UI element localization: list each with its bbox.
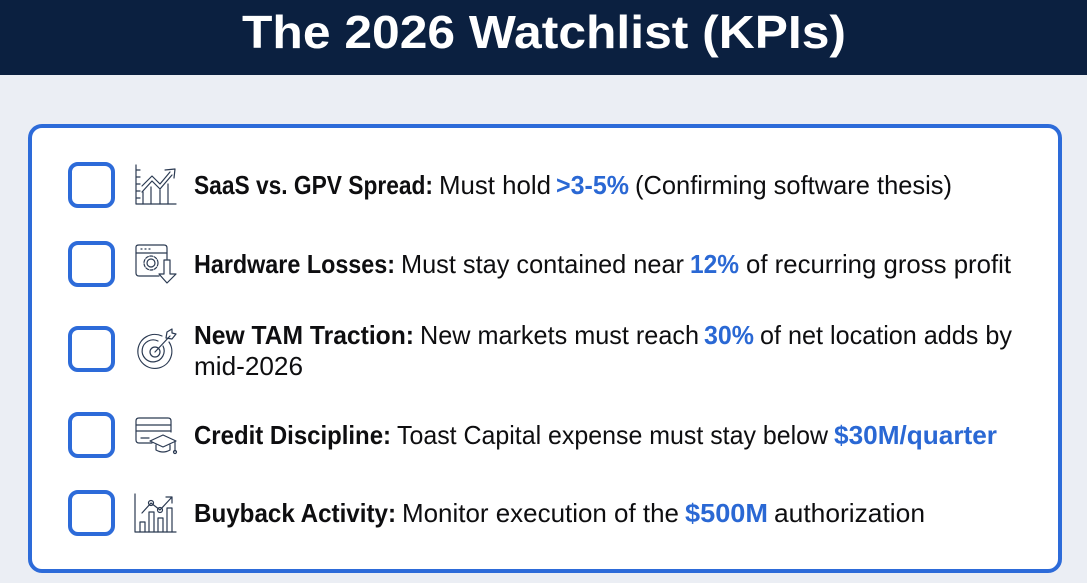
icon: bar chart with trend line bbox=[135, 494, 176, 532]
checkbox bbox=[70, 243, 113, 285]
KPI text: Credit Discipline: bbox=[194, 420, 391, 450]
KPI text: authorization bbox=[774, 498, 925, 528]
KPI text: >3-5% bbox=[556, 170, 629, 200]
KPI text: of net location adds by bbox=[760, 320, 1012, 350]
KPI row: SaaS vs. GPV Spread bbox=[70, 164, 952, 206]
panel: KPI checklist bbox=[30, 126, 1060, 571]
KPI text: 12% bbox=[690, 249, 739, 279]
title: The 2026 Watchlist (KPIs) bbox=[242, 6, 846, 58]
KPI text: Must stay contained near bbox=[401, 249, 684, 279]
icon: target with arrow bbox=[138, 329, 176, 368]
KPI row: Credit Discipline bbox=[70, 414, 997, 456]
KPI row: New TAM Traction bbox=[70, 320, 1012, 381]
KPI text: Toast Capital expense must stay below bbox=[397, 420, 828, 450]
KPI text: 30% bbox=[704, 320, 754, 350]
icon: credit card with graduation cap bbox=[136, 418, 176, 454]
KPI text bbox=[194, 170, 952, 200]
icon: rising chart bbox=[136, 165, 176, 204]
KPI text: (Confirming software thesis) bbox=[635, 170, 952, 200]
KPI text: $30M/quarter bbox=[834, 420, 997, 450]
KPI text: Buyback Activity: bbox=[194, 498, 396, 528]
KPI row: Hardware Losses bbox=[70, 243, 1012, 285]
KPI text: SaaS vs. GPV Spread: bbox=[194, 170, 433, 200]
KPI text bbox=[194, 320, 1012, 381]
KPI text bbox=[194, 249, 1012, 279]
checkbox bbox=[70, 164, 113, 206]
checkbox bbox=[70, 492, 113, 534]
KPI text: Monitor execution of the bbox=[402, 498, 679, 528]
KPI row: Buyback Activity bbox=[70, 492, 925, 534]
checkbox bbox=[70, 328, 113, 370]
icon: settings window with down arrow bbox=[136, 245, 176, 283]
title banner bbox=[0, 0, 1087, 75]
KPI text bbox=[194, 420, 997, 450]
KPI text: mid-2026 bbox=[194, 351, 303, 381]
KPI text: Must hold bbox=[439, 170, 551, 200]
KPI text bbox=[194, 498, 925, 528]
KPI text: New markets must reach bbox=[420, 320, 699, 350]
KPI text: of recurring gross profit bbox=[746, 249, 1012, 279]
checkbox bbox=[70, 414, 113, 456]
KPI text: Hardware Losses: bbox=[194, 249, 395, 279]
KPI text: New TAM Traction: bbox=[194, 320, 414, 350]
KPI text: $500M bbox=[685, 498, 768, 528]
